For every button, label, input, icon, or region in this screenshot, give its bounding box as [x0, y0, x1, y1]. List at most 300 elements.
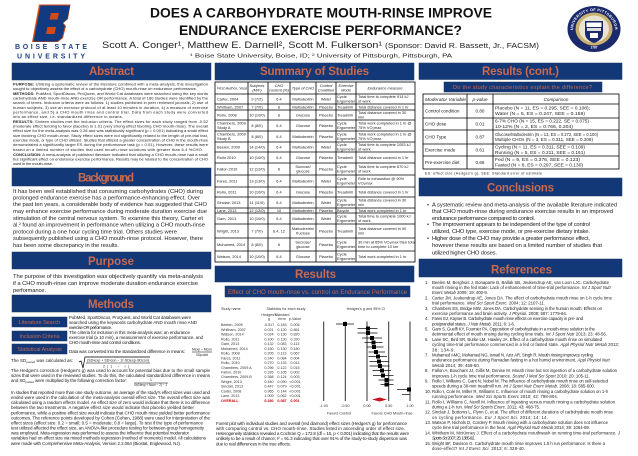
forest plot: table of study statistics: Standard — [275, 313, 289, 317]
table: study characteristics: Chambers, 2009 — [217, 120, 246, 126]
conclusions heading — [419, 178, 622, 196]
forest plot: table of study statistics: Whitham, 2007 — [221, 328, 246, 332]
table: study characteristics: 12 (12/0) — [249, 208, 265, 213]
forest plot: table of study statistics: 0.240 — [264, 356, 274, 360]
abstract text: size favoring CHO mouth-rinse. Study effect sizes were not significantly related to the length of pre-trial fast, — [13, 133, 208, 138]
panel: methods — [11, 295, 212, 446]
abstract text: RESULTS: Sixteen studies met the inclusion criteria. The effect sizes for each study ranged from -0.52 — [13, 119, 209, 124]
abstract text: used in the mouth-rinse. — [13, 161, 53, 166]
formula: correction factor — [134, 378, 168, 387]
table: study characteristics: Subjects — [250, 83, 265, 88]
forest plot: table of study statistics: 0.368 — [264, 375, 274, 379]
table: moderator variables: Glucose/Maltodextrin (N = 13, ES = 0.272, SEE = 0.100) — [495, 132, 598, 137]
reference list: during a 1-h run. Med Sci Sports Exerc. 2011; 43: 468-75. — [432, 404, 540, 410]
forest plot: table of study statistics: 0.124 — [277, 375, 287, 379]
formula: standardized difference: Mexp − Mcon — [192, 348, 212, 352]
results continued heading — [419, 63, 622, 80]
reference list: 3. — [425, 306, 429, 311]
forest plot: table of study statistics: Wright, 2013 — [221, 380, 242, 384]
summary heading — [215, 63, 414, 80]
table: study characteristics: 6 — [278, 242, 280, 247]
forest plot caption: unlikely to be a result of chance; I² = 91.3 indicating that over 91% of the study-to-study dispersion was — [216, 436, 408, 441]
table: study characteristics: Cycle — [337, 252, 347, 256]
forest plot: table of study statistics: 0.130 — [277, 333, 287, 337]
abstract text: sought to objectively assess the effect of a carbohydrate (CHO) mouth-rinse on endurance performance. — [13, 86, 197, 91]
reference list: Chambers ES, Bridge MW, Jones DA. Carbohydrate sensing in the human mouth: Effects on — [432, 306, 603, 311]
abstract text: METHODS: PubMed, SportDiscus, ProQuest, and World Cat databases were searched using the key words — [13, 91, 208, 96]
table: study characteristics: 10 (10/0) — [249, 155, 265, 160]
table: study characteristics: Type of CHO — [292, 85, 314, 90]
table: study characteristics: Total work completed in 1 hr — [358, 208, 407, 213]
logo: Boise State University: BOISE STATE — [15, 44, 87, 51]
table: study characteristics: 6.4 — [276, 134, 283, 139]
table: study characteristics: of work — [358, 146, 371, 151]
forest plot: table of study statistics: <0.001 — [289, 389, 301, 393]
forest plot: table of study statistics: Chambers, 2009 B — [221, 375, 252, 379]
table: study characteristics: Mode — [341, 87, 352, 92]
reference list: exercise performance and brain activity. J Physiol. 2009; 587: 1779-94. — [432, 311, 567, 316]
table: study characteristics: 10 (10/0) — [249, 112, 265, 117]
table: study characteristics: 6.4 — [276, 144, 283, 149]
formula: pooled standard deviation — [79, 357, 150, 368]
forest plot: chart of effect sizes: Favors Control — [327, 412, 351, 416]
reference list: cycle time trial performance in the heat. Appl Physiol Nutr Metab 2014; 39: 1064-69. — [432, 425, 590, 430]
forest plot: table of study statistics: Rollo, 2008 — [221, 352, 240, 356]
background text: the past ten years, a considerable body of evidence has suggested that CHO — [13, 202, 207, 208]
table: study characteristics: Ergometer — [337, 180, 356, 185]
table: moderator variables: Comparison — [544, 97, 569, 102]
table: study characteristics: Sucrose/ — [295, 240, 312, 244]
logo: Boise State University — [15, 4, 87, 60]
table: study characteristics: Treadmill — [337, 228, 353, 233]
formula: standardized difference — [192, 348, 212, 357]
table: moderator variables: Fed (N = 9, ES = 0.376, SEE = 0.123) — [495, 157, 581, 162]
table: moderator variables — [423, 94, 619, 169]
table: study characteristics: 75% VO₂max — [358, 136, 381, 141]
forest plot: table of study statistics: 0.113 — [278, 352, 286, 356]
forest plot: table of study statistics: Carter, 2008 — [221, 389, 241, 393]
table: moderator variables: Cycling (N = 11, ES = 0.311, SEE = 0.109) — [495, 145, 585, 150]
label: statistical analysis: Statistical Analysis — [17, 347, 62, 353]
panel: background — [12, 168, 211, 249]
forest plot: table of study statistics: <0.001 — [289, 380, 301, 384]
table: study characteristics: 9 (7/2) — [251, 96, 263, 101]
table: study characteristics: Condition — [318, 87, 334, 92]
reference list: 10. — [425, 389, 431, 394]
background heading — [12, 168, 211, 186]
conclusions bullets: • — [427, 236, 429, 242]
panel: references — [419, 259, 622, 451]
reference list: detrimental effect of mouth rinsing during cycling time trials. Int J Sport Nutr 2013; 23: 48-56. — [432, 332, 607, 337]
label: literature search: Literature Search — [19, 320, 60, 326]
forest plot: table of study statistics: 0.067 — [290, 352, 300, 356]
methods text: exercise trial (≥ 10 min), a measurement of exercise performance, and — [69, 335, 203, 340]
forest plot: table of study statistics: Gam, 2013 — [221, 342, 239, 346]
methods text: test utilized affected the effect size, an ANOVA-like procedure testing for between-group homogeneity — [11, 426, 205, 430]
authors and affiliations: Scott A. Conger¹, Matthew E. Darnell², Scott M. Fulkerson¹ — [102, 40, 382, 51]
table: study characteristics: Placebo — [319, 228, 333, 233]
table: study characteristics: (M/F) — [252, 87, 262, 92]
table: study characteristics: 8 (8/0) — [251, 242, 263, 247]
table: study characteristics: Placebo — [319, 112, 333, 117]
summary heading: Summary of Studies — [260, 66, 369, 78]
panel: summary of studies — [215, 63, 416, 262]
reference list: on cycling performance. Eur J Sport Sci. 2014; 14: 14. — [432, 415, 548, 420]
formula: pooled standard deviation: (SD²exp + SD²con − 2r·SDexp·SDcon) — [87, 358, 149, 362]
reference list: postprandial states. J Nutr Metab. 2011; 6: 1-6. — [432, 321, 515, 326]
table: study characteristics: 6.4 — [276, 96, 283, 101]
reference list: 13. — [425, 420, 431, 425]
panel: results — [215, 266, 414, 446]
forest plot caption: with comparing control vs. CHO mouth-rinse. Studies listed in ascending order of effect size. — [216, 426, 405, 431]
methods text: between the two treatments. A negative effect size would indicate that placebo yielded better — [11, 405, 194, 410]
abstract text: carbohydrate AND mouth-rinse AND exercise OR performance. A total of 180 studies were identified by the — [13, 96, 209, 100]
methods heading: Methods — [88, 299, 134, 311]
reference list: speeds during a 30-min treadmill run. Int J Sport Nutr Exerc Metab. 2008; 18: 585-600. — [432, 384, 595, 389]
reference list: Fares EJ, Kayser B. Carbohydrate mouth rinse effects on exercise capacity in pre- and — [432, 316, 584, 321]
reference list: Fallon A, Bouchant JJ, Gillis M, Denise M. Mouth rinse but not ingestion of a carbohydrate solution — [432, 368, 618, 373]
abstract heading — [12, 63, 211, 80]
forest plot: table of study statistics: 0.002 — [290, 370, 300, 374]
reference list: Rollo I, Williams C, Nevill M. Influence of ingesting versus mouth rinsing a carbohydrate solution — [432, 399, 616, 404]
methods text: The criteria for inclusion in this meta-analysis was: an endurance — [69, 330, 190, 335]
table: moderator variables: 0.87 — [476, 134, 485, 140]
table: study characteristics: Ergometer — [337, 256, 356, 261]
reference list: Watson P, Nichols D, Cordery P. Mouth rinsing with a carbohydrate solution does not influence — [432, 420, 609, 425]
table: study characteristics: 6.4 — [276, 189, 283, 194]
table: study characteristics: glucose — [296, 244, 310, 249]
table: study characteristics: Endurance measure — [367, 85, 403, 90]
forest plot: table of study statistics: 0.205 — [264, 352, 274, 356]
conclusions heading: Conclusions — [487, 182, 554, 194]
forest plot: table of study statistics: 0.105 — [277, 370, 287, 374]
logo: University of Pittsburgh seal: 1787 — [590, 46, 598, 50]
logo: University of Pittsburgh seal: UNIVERSITY OF PITTSBURGH — [570, 8, 618, 30]
purpose text — [13, 274, 203, 294]
forest plot: table of study statistics: 0.132 — [264, 342, 274, 346]
reference list: Beelen M, Berghuis J, Bonaparte B, Ballak SB, Jeukendrup AE, van Loon LJC. Carbohydrate — [432, 280, 610, 285]
table: study characteristics: Rollo 2010 — [217, 155, 236, 160]
methods text: The Hedges's correction (Hedges's g) was used to account for potential bias due to the small sample — [11, 368, 210, 373]
table: study characteristics: 7 (7/0) — [251, 228, 263, 233]
methods text: sizes that were used in the reviewed studies. To do this, the calculated standardized difference in means — [11, 373, 211, 378]
label: statistical analysis — [12, 344, 67, 354]
references heading: References — [491, 264, 552, 276]
forest plot: table of study statistics: 0.083 — [277, 342, 287, 346]
forest plot: table of study statistics: 0.084 — [277, 356, 287, 360]
reference list: dose-effect? Int J Exerc Sci. 2013; 6: 328-40. — [432, 446, 525, 451]
table: study characteristics: min — [358, 114, 364, 119]
table: study characteristics: Bicycle — [337, 208, 349, 213]
table: study characteristics: Water — [321, 96, 332, 101]
reference list: Exerc Metab 2009; 19: 400-9. — [432, 290, 488, 295]
forest plot: chart of effect sizes: -0.50 — [341, 404, 350, 408]
table: study characteristics: Gam, 2013 — [217, 216, 236, 221]
label: inclusion criteria — [12, 331, 67, 341]
table: study characteristics: 8 (8/0) — [251, 134, 263, 139]
forest plot: table of study statistics: Lane, 2013 — [221, 394, 239, 398]
reference list: 7. — [425, 352, 429, 358]
forest plot: table of study statistics: Fallon, 2010 — [221, 370, 241, 374]
table: study characteristics: Treadmill — [337, 155, 353, 160]
forest plot: table of study statistics — [221, 307, 306, 403]
conclusions bullets: utilized higher CHO doses. — [432, 250, 497, 256]
forest plot: table of study statistics: 0.122 — [277, 366, 287, 370]
table: study characteristics: Rollo, 2008 — [217, 112, 237, 117]
methods text: pooled — [25, 380, 34, 384]
background text: protocol during a one hour cycling time trial. Others studies were — [13, 230, 177, 236]
table: study characteristics: of work — [358, 218, 371, 223]
table: study characteristics: of work — [358, 98, 371, 103]
authors and affiliations — [102, 40, 539, 60]
conclusions bullets: • — [427, 202, 429, 208]
table: study characteristics: Sinclair, 2013 — [217, 200, 240, 205]
authors and affiliations: ¹ Boise State University, Boise, ID; ² University of Pittsburgh, Pittsburgh, PA — [190, 54, 452, 60]
conclusions bullets: • — [427, 222, 429, 228]
methods text: CHO mouth-rinse and control conditions. — [69, 340, 141, 345]
conclusions bullets — [427, 202, 617, 256]
table: moderator variables: Multiple CHOs (N = 3, ES = 0.311, SEE = 0.208) — [495, 137, 593, 142]
background text: prolonged endurance exercise has a performance-enhancing effect. Over — [13, 196, 200, 202]
table: study characteristics: Lane, 2013 — [217, 208, 236, 213]
forest plot: table of study statistics: 0.180 — [290, 347, 300, 351]
methods text: outcomes. The reference points developed by Cohen (Cohen, 1988) were used for interpretation of the — [11, 415, 210, 420]
reference list: Whitham M, McKinney J. Effect of a carbohydrate mouthwash on running time-trial performance. J — [432, 430, 621, 435]
table: study characteristics: glucose — [296, 168, 310, 173]
table: study characteristics — [215, 82, 416, 262]
table: study characteristics: Control — [320, 83, 332, 88]
methods text: effect sizes (effect size: 0.2 = small; 0.5 = moderate; 0.8 = large). To test if the type of performance — [11, 420, 203, 425]
table: study characteristics: Total work completed in 1 hr @ — [358, 132, 412, 136]
forest plot: table of study statistics: 0.820 — [290, 333, 300, 337]
table: study characteristics: fructose — [296, 230, 310, 235]
methods text: were multiplied by the following correction factor: — [34, 378, 127, 383]
methods heading — [12, 295, 211, 312]
table: moderator variables: CHO Type — [425, 134, 447, 140]
table: study characteristics: of work — [358, 168, 371, 173]
table: moderator variables: Water (N = 5, ES = 0.247, SEE = 0.159) — [495, 111, 586, 116]
table: study characteristics: 6.4 — [276, 254, 283, 259]
table: study characteristics: Total distance covered in 90 — [358, 226, 407, 231]
abstract text: exercise mode, or type of CHO utilized. Studies that utilized a greater concentration of CHO in the mouth-rinse — [13, 138, 209, 142]
reference list: endurance performance during Ramadan fasting in a hot humid environment. Appl Physiol Nutr — [432, 358, 611, 363]
forest plot: table of study statistics: 0.965 — [264, 389, 274, 393]
table: study characteristics: Glucose — [296, 112, 310, 117]
panel: purpose — [12, 252, 211, 294]
forest plot: table of study statistics: 0.079 — [277, 385, 287, 389]
table: study characteristics: Total distance covered in 1 hr — [358, 104, 409, 109]
table: study characteristics: Exercise — [339, 83, 354, 88]
forest plot: table of study statistics: 0.001 — [290, 399, 300, 403]
forest plot: table of study statistics: Watson, 2014 — [221, 333, 244, 337]
results heading — [215, 266, 414, 282]
table: study characteristics: Ride to exhaustion @ 90% — [358, 176, 405, 181]
forest plot: table of study statistics: Beelen, 2009 — [221, 323, 243, 327]
table: moderator variables: 0.01 — [476, 122, 485, 126]
forest plot: table of study statistics: 0.005 — [290, 323, 300, 327]
reference list: Metab 2014; 39: 458-60. — [432, 363, 480, 368]
table: study characteristics: 6.4 — [276, 123, 283, 128]
abstract text: PURPOSE: Utilizing a systematic review of the literature combined with a meta-analysis, this investigation — [13, 82, 208, 86]
background text: It has been well established that consuming carbohydrates (CHO) during — [13, 189, 203, 195]
forest plot caption: Forest plot with individual studies and overall (red diamond) effect sizes (Hedges's g) for performance — [216, 421, 407, 426]
table: study characteristics: Glucose — [296, 155, 310, 160]
table: study characteristics: 14 (14/0) — [249, 144, 265, 149]
table: study characteristics: Placebo — [319, 242, 333, 247]
table: study characteristics: Cycle — [337, 142, 347, 147]
forest plot: table of study statistics: 0.130 — [277, 337, 287, 341]
references heading — [419, 259, 622, 277]
background text: al.² found an improvement in performance when utilizing a CHO mouth-rinse — [13, 223, 205, 229]
forest plot: table of study statistics: 0.024 — [264, 333, 274, 337]
forest plot: table of study statistics: Fares, 2011 — [221, 356, 240, 360]
conclusions bullets: that CHO mouth-rinse during endurance exercise results in an improved — [432, 209, 613, 215]
methods text: and SD — [11, 378, 26, 383]
forest plot: table of study statistics: 0.144 — [277, 389, 287, 393]
table: study characteristics: Placebo — [319, 134, 333, 139]
reference list: 1. — [425, 280, 429, 285]
background heading: Background — [78, 172, 134, 184]
formula: correction factor: 1 — [150, 378, 152, 382]
reference list: mouth rinsing in the fed state: Lack of enhancement of time-trial performance. Int J Sport Nutr — [432, 285, 612, 290]
table: study characteristics: Cycle — [337, 120, 347, 126]
table: moderator variables: Fasted (N = 8, ES = 0.297, SEE = 0.130) — [495, 162, 583, 168]
abstract text: but significant effect on endurance exercise performance. Results may be related to the concentration of CHO — [13, 156, 208, 162]
reference list: running performance. Med Sci Sports Exerc 2010; 42: 798-804. — [432, 394, 558, 399]
forest plot: table of study statistics: Rollo, 2010 — [221, 361, 240, 365]
table: study characteristics: Muhamed, 2014 — [217, 242, 246, 247]
purpose heading — [12, 252, 211, 269]
forest plot: table of study statistics: 0.296 — [264, 366, 274, 370]
forest plot: table of study statistics: 0.320 — [290, 337, 300, 341]
table: study characteristics: 6.4 — [276, 216, 283, 221]
methods text: performance, while a positive effect size would indicate that CHO mouth rinse yielded better performance — [11, 410, 210, 415]
forest plot: chart of effect sizes — [319, 307, 414, 416]
table: study characteristics: Maltodextrin — [292, 144, 314, 149]
purpose text: The purpose of this investigation was objectively quantify via meta-analysis — [13, 274, 203, 280]
table: study characteristics: Maltodextrin/ — [292, 226, 315, 231]
overall effect diamond — [372, 398, 387, 402]
table: study characteristics: Ergometer — [337, 202, 356, 207]
forest plot: table of study statistics: 0.014 — [290, 361, 300, 365]
results continued heading: Results (cont.) — [482, 66, 559, 78]
reference list: Sinclair J, Bottoms L, Flynn C, et al. The effect of different durations of carbohydrate mouth rinse — [432, 410, 614, 415]
table: moderator variables: 0.66 — [476, 160, 485, 165]
table: study characteristics: Ergometer — [337, 98, 356, 103]
forest plot: table of study statistics: Rollo, 2011 — [221, 337, 239, 341]
reference list: 4. — [425, 316, 429, 321]
table: study characteristics: Placebo — [319, 254, 333, 259]
table: study characteristics: 10 (10/0) — [249, 189, 265, 194]
forest plot: table of study statistics: 0.130 — [277, 347, 287, 351]
table: study characteristics: Rollo, 2011 — [217, 189, 236, 194]
reference list: 12. — [425, 410, 431, 415]
forest plot: table of study statistics: 0.280 — [264, 399, 274, 403]
table: study characteristics: Sucrose/ — [295, 164, 312, 169]
forest plot: chart of effect sizes: -1.00 — [319, 404, 328, 408]
forest plot: chart of effect sizes: Favors CHO Mouth-rinse — [372, 412, 412, 416]
forest plot: table of study statistics: Sinclair, 2013 — [221, 385, 243, 389]
table: study characteristics: Total work completed in 1 hr — [358, 254, 407, 259]
conclusions bullets: utilized, CHO type, exercise mode, or pre-exercise dietary intake. — [432, 229, 590, 235]
forest plot: table of study statistics: <0.001 — [289, 394, 301, 398]
methods text: exercise OR performance. — [69, 325, 112, 330]
authors and affiliations: (Sponsor: David R. Bassett, Jr., FACSM) — [385, 43, 539, 50]
reference list: cycling time-trial performance commenced in a fed or fasted state. Appl Physiol Nutr Metab 2013; — [432, 342, 619, 347]
reference list: 2. — [425, 295, 429, 300]
abstract text: into an effect size, i.e. standardized difference in means. — [13, 114, 123, 119]
formula: correction factor: 4×(Nexp + Ncon − 2) − 1 — [134, 383, 167, 387]
table: study characteristics: Water — [321, 144, 332, 149]
reference list: Carter JM, Jeukendrup AE, Jones DA. The effect of carbohydrate mouth rinse on 1-h cycle time — [432, 295, 613, 300]
table: study characteristics: Ergometer — [337, 146, 356, 151]
table: study characteristics: Beelen, 2009 — [217, 144, 240, 149]
table: study characteristics: 10 — [277, 208, 282, 213]
table: moderator variables: Control condition — [425, 108, 460, 114]
forest plot: chart of effect sizes: Hedges's g and 95% CI — [347, 307, 385, 311]
reference list: 8. — [425, 368, 429, 373]
methods text: ended were used in the calculation of the meta-analysis overall effect size. The overall effect size was — [11, 395, 211, 400]
table: study characteristics: 75% VO₂max — [358, 125, 381, 130]
purpose text: if a CHO mouth-rinse can improve moderate duration endurance exercise — [13, 281, 198, 287]
table: study characteristics: Fares, 2011 — [217, 178, 237, 183]
abstract text: effect size for the meta-analysis was 0.28 and was statistically significant (p = 0.001) indicating a small effect — [13, 128, 209, 133]
table: study characteristics: 6 — [278, 104, 280, 109]
forest plot: table of study statistics: OVERALL — [221, 399, 239, 403]
results subheading: Effect of CHO mouth-rinse vs. control on Endurance Performance — [228, 290, 408, 296]
table: study characteristics: Ergometer — [337, 168, 356, 173]
table: moderator variables: 10-12% (N = 2, ES = 0.766, 0.204) — [495, 124, 574, 129]
abstract text: CONCLUSION: A meta-analysis of published literature indicated that utilizing a CHO mouth-rinse had a small — [13, 152, 208, 157]
table: study characteristics: Placebo — [319, 208, 333, 213]
table: study characteristics: Maltodextrin — [292, 178, 314, 183]
forest plot: table of study statistics: 0.133 — [277, 361, 287, 365]
table: study characteristics: Treadmill — [337, 104, 353, 109]
forest plot: table of study statistics: 0.861 — [290, 328, 300, 332]
forest plot: table of study statistics: 0.113 — [291, 342, 299, 346]
panel: results continued — [419, 63, 622, 176]
background text: has been some discrepancy in the results. — [13, 243, 119, 249]
table: moderator variables: CHO dose — [425, 122, 447, 126]
methods text: was calculated as: — [35, 358, 73, 363]
table: study characteristics: Treadmill — [337, 112, 353, 117]
label: inclusion criteria: Inclusion Criteria — [19, 334, 60, 340]
table: study characteristics: Whitham, 2007 — [217, 104, 243, 109]
forest plot: table of study statistics: Muhamed, 2014 — [221, 347, 248, 351]
abstract heading: Abstract — [89, 66, 134, 78]
forest plot: table of study statistics: Statistics for each study — [267, 307, 306, 311]
conclusions bullets: Higher dose of the CHO may provide a greater performance effect, — [432, 236, 590, 242]
background text: subsequently published using a CHO mouth-rinse protocol. However, there — [13, 236, 203, 242]
table: study characteristics: Maltodextrin — [292, 134, 314, 139]
purpose heading: Purpose — [88, 256, 134, 268]
forest plot: table of study statistics: 0.120 — [277, 328, 287, 332]
table: moderator variables: 0.61 — [476, 148, 485, 152]
reference list: Gam S, Guelfi KY, Fournier PA. Opposition of carbohydrate in a mouth-rinse solution to the — [432, 326, 596, 332]
table: study characteristics: Placebo — [319, 104, 333, 109]
table: study characteristics: Total time to complete 1000 kJ — [358, 214, 411, 218]
table: study characteristics: 6.4, 12 — [273, 228, 285, 233]
table: study characteristics: Study A — [217, 125, 231, 130]
table: moderator variables: Pre-exercise diet — [425, 160, 460, 165]
abstract text: search of terms. Inclusion criteria were as follows: 1) studies published in peer reviewed journals, 2) use of — [13, 100, 209, 105]
table: study characteristics: 30 min at 65% VO₂max then total — [358, 240, 416, 244]
reference list: 5. — [425, 326, 429, 332]
reference list: Rollo I, Cole M, Miller R, Williams C. Influence of mouth rinsing a carbohydrate solution on 1-h — [432, 389, 609, 394]
title: DOES A CARBOHYDRATE MOUTH-RINSE IMPROVE — [150, 6, 492, 20]
reference list: 15. — [425, 441, 431, 446]
conclusions bullets: The improvement appears to be independent of the type of control — [432, 222, 590, 228]
